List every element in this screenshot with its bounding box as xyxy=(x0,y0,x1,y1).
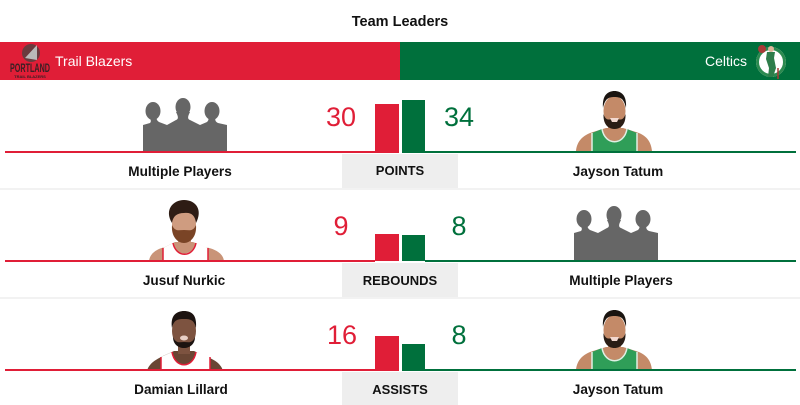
Trail Blazers points bar xyxy=(375,104,399,153)
header: Trail Blazers xyxy=(0,42,400,80)
icon: multiple players silhouette xyxy=(574,206,658,260)
Trail Blazers assists value: 16 xyxy=(327,320,357,350)
team name: Trail Blazers xyxy=(55,53,132,69)
Trail Blazers rebounds line xyxy=(5,260,375,262)
REBOUNDS label: REBOUNDS xyxy=(363,273,437,288)
Jusuf Nurkic name: Jusuf Nurkic xyxy=(143,273,225,288)
row: rebounds xyxy=(5,200,796,297)
icon: Trail Blazers logo: PORTLAND xyxy=(10,61,50,75)
Trail Blazers points line xyxy=(5,151,375,153)
ASSISTS label: ASSISTS xyxy=(372,382,428,397)
Celtics assists line xyxy=(425,369,796,371)
Jayson Tatum name: Jayson Tatum xyxy=(573,382,663,397)
row divider xyxy=(0,297,800,299)
Trail Blazers points value: 30 xyxy=(326,102,356,132)
icon: Jayson Tatum photo xyxy=(576,310,652,369)
Celtics rebounds line xyxy=(425,260,796,262)
Damian Lillard name: Damian Lillard xyxy=(134,382,228,397)
Celtics rebounds bar xyxy=(402,235,425,261)
icon: Trail Blazers logo xyxy=(10,44,50,79)
title: Team Leaders xyxy=(352,14,448,30)
Trail Blazers assists bar xyxy=(375,336,399,371)
icon: Celtics logo xyxy=(756,45,786,79)
icon: Jusuf Nurkic photo xyxy=(149,200,224,260)
Jayson Tatum name: Jayson Tatum xyxy=(573,164,663,179)
Celtics rebounds value: 8 xyxy=(451,211,467,241)
Celtics assists value: 8 xyxy=(451,320,467,350)
Trail Blazers rebounds bar xyxy=(375,234,399,261)
row divider xyxy=(0,188,800,190)
Trail Blazers rebounds value: 9 xyxy=(333,211,349,241)
Celtics assists bar xyxy=(402,344,425,371)
POINTS label xyxy=(342,154,458,188)
Celtics points value: 34 xyxy=(444,102,474,132)
Trail Blazers assists line xyxy=(5,369,375,371)
icon: Trail Blazers logo: TRAIL BLAZERS xyxy=(14,74,46,79)
row: assists xyxy=(5,310,796,405)
icon: Jayson Tatum photo xyxy=(576,91,652,151)
icon: Damian Lillard photo xyxy=(148,311,222,369)
Multiple Players name: Multiple Players xyxy=(569,273,673,288)
POINTS label: POINTS xyxy=(376,163,424,178)
header: Celtics xyxy=(400,42,800,80)
Celtics points line xyxy=(425,151,796,153)
icon: multiple players silhouette xyxy=(143,98,227,151)
Multiple Players name: Multiple Players xyxy=(128,164,232,179)
ASSISTS label xyxy=(342,372,458,405)
team name: Celtics xyxy=(705,53,747,69)
Celtics points bar xyxy=(402,100,425,153)
row: points xyxy=(5,91,796,188)
REBOUNDS label xyxy=(342,263,458,297)
